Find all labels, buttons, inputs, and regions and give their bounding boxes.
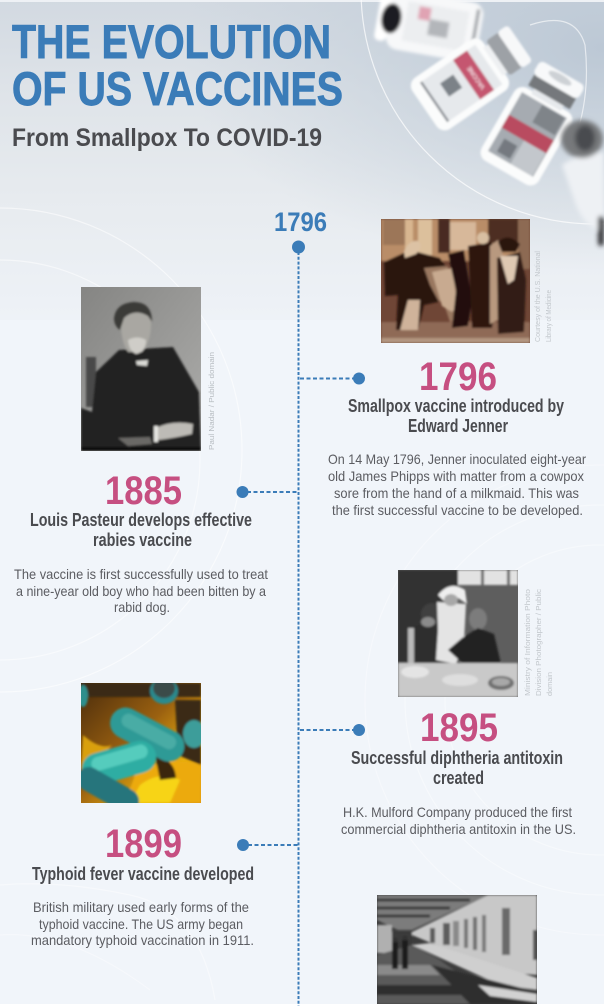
vial 1 <box>372 0 485 64</box>
body text: old James Phipps with matter from a cowpox <box>328 468 584 484</box>
connector 1895 <box>300 724 365 736</box>
photo credit: domain <box>545 672 554 696</box>
heading: created <box>433 768 484 788</box>
connector 1885 <box>236 486 298 498</box>
title: THE EVOLUTION <box>12 15 331 68</box>
body text <box>328 451 586 518</box>
body text: The vaccine is first successfully used to treat <box>14 566 268 582</box>
title: OF US VACCINES <box>12 62 343 115</box>
heading: Louis Pasteur develops effective <box>30 510 252 530</box>
photo: Jenner inoculating James Phipps <box>381 219 530 343</box>
image: typhoid bacteria <box>81 683 201 803</box>
entry: 1796 smallpox <box>300 219 586 518</box>
photo credit <box>533 251 553 342</box>
heading: Typhoid fever vaccine developed <box>32 864 254 884</box>
photo credit <box>523 589 554 696</box>
heading <box>30 510 252 550</box>
subtitle: From Smallpox To COVID-19 <box>12 124 322 152</box>
timeline axis <box>292 240 305 1006</box>
body text <box>341 804 576 837</box>
body text: sore from the hand of a milkmaid. This was <box>334 485 579 501</box>
heading: rabies vaccine <box>93 530 192 550</box>
entry: 1899 typhoid <box>31 678 298 948</box>
timeline start label: 1796 <box>274 207 327 237</box>
body text: rabid dog. <box>114 599 170 615</box>
vial 2: VACCINE <box>467 65 487 90</box>
entry: 1885 rabies <box>14 287 298 615</box>
vaccine vials illustration <box>372 0 604 246</box>
entry: 1895 diphtheria <box>300 570 576 837</box>
photo: diphtheria treatment <box>398 570 518 697</box>
vial 3 <box>477 57 592 189</box>
body text: a nine-year old boy who had been bitten by a <box>16 583 266 599</box>
photo credit: Paul Nadar / Public domain <box>207 352 216 450</box>
photo credit: Courtesy of the U.S. National <box>533 251 542 342</box>
vial 2 <box>407 17 538 134</box>
body text: British military used early forms of the <box>33 899 249 915</box>
body text: mandatory typhoid vaccination in 1911. <box>31 932 254 948</box>
body text: H.K. Mulford Company produced the first <box>343 804 572 820</box>
year: 1796 <box>419 355 497 399</box>
body text: commercial diphtheria antitoxin in the US. <box>341 821 576 837</box>
photo credit: Ministry of Information Photo <box>523 589 532 696</box>
body text <box>31 899 254 948</box>
vial 4 blurred at the edge <box>561 120 604 246</box>
title <box>12 15 343 115</box>
body text: the first successful vaccine to be developed. <box>332 502 583 518</box>
photo: Louis Pasteur portrait <box>81 287 201 451</box>
photo credit: Division Photographer / Public <box>534 589 543 696</box>
photo: hospital ward <box>377 895 537 1004</box>
body text <box>14 566 268 615</box>
year: 1899 <box>105 822 182 866</box>
body text: typhoid vaccine. The US army began <box>39 916 243 932</box>
heading: Edward Jenner <box>408 416 508 436</box>
connector 1796 <box>300 372 365 384</box>
heading <box>351 748 563 788</box>
heading <box>348 396 564 436</box>
year: 1895 <box>420 706 498 750</box>
photo credit: Library of Medicine <box>544 290 553 342</box>
year: 1885 <box>105 469 182 513</box>
connector 1899 <box>237 839 298 851</box>
